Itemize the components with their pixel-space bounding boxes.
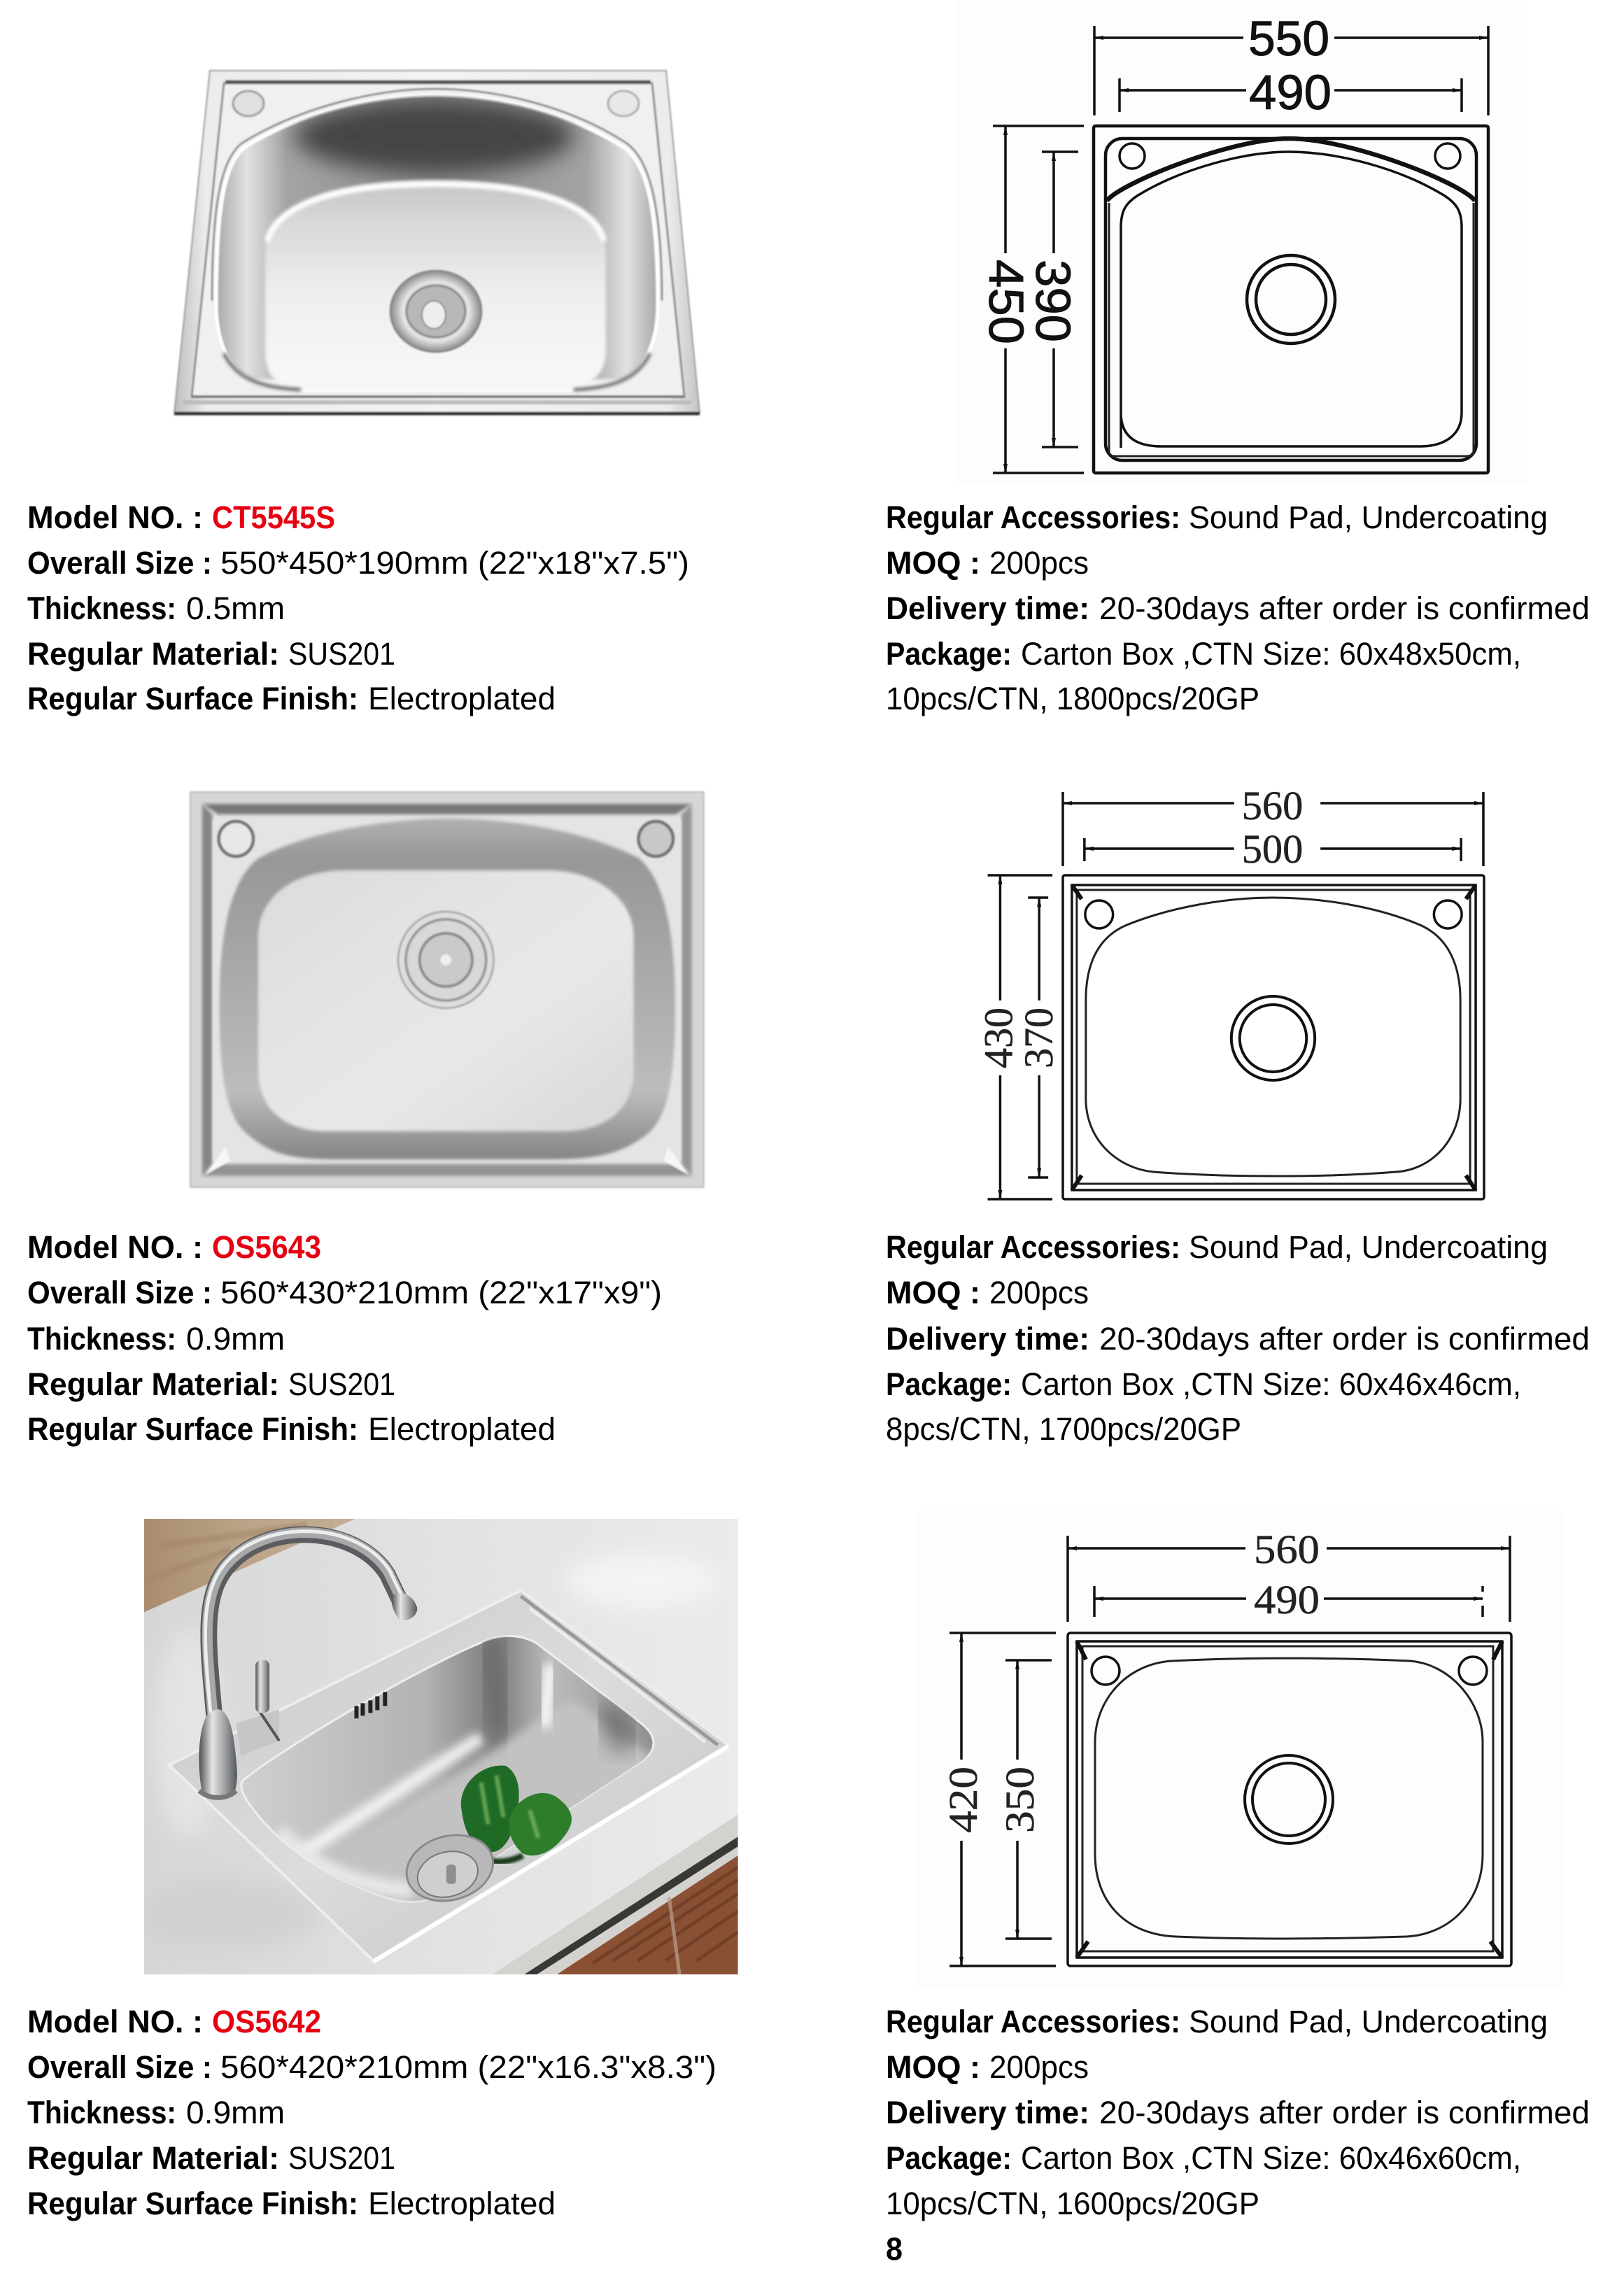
dimension: height 450 [979, 126, 1084, 473]
text block: OS5643 logistics: Carton Box ,CTN Size: 60x46x46cm, [1021, 1366, 1521, 1402]
technical drawing: OS5642 [916, 1511, 1563, 1988]
dimension: height 370 [1016, 898, 1061, 1177]
dimension: width 500 [1085, 826, 1461, 872]
text block: OS5642 logistics: Sound Pad, Undercoating [1189, 2004, 1548, 2039]
text block: CT5545S logistics: Carton Box ,CTN Size: 60x48x50cm, [1021, 636, 1521, 672]
dimension: width 490 [1094, 1577, 1483, 1622]
dimension: height 350: 350 [997, 1767, 1043, 1833]
text block: OS5642 logistics: Regular Accessories: [886, 2004, 1180, 2039]
page number: 8 [886, 2231, 903, 2267]
text block: OS5642 logistics: Delivery time: [886, 2095, 1089, 2130]
dimension: width 550: 550 [1248, 11, 1329, 66]
dimension: width 560 [1063, 783, 1483, 866]
text block: CT5545S logistics: 200pcs [989, 545, 1089, 581]
text block: OS5643 specifications: Thickness: [27, 1321, 176, 1357]
panel: model CT5545S [27, 0, 1590, 716]
text block: OS5643 logistics: Delivery time: [886, 1321, 1089, 1357]
text block: OS5643 specifications: Electroplated [368, 1411, 556, 1447]
text block: OS5643 logistics: 200pcs [989, 1275, 1089, 1310]
text block: OS5642 specifications: SUS201 [288, 2140, 395, 2176]
icon: overflow slots [356, 1692, 385, 1718]
text block: OS5643 logistics: Sound Pad, Undercoating [1189, 1229, 1548, 1265]
dimension: height 350 [997, 1660, 1052, 1939]
text block: OS5643 specifications [27, 1229, 662, 1447]
text block: CT5545S logistics: Package: [886, 636, 1012, 672]
photo: sink OS5643 [190, 792, 704, 1187]
text block: OS5642 specifications: 560*420*210mm (22"x16.3"x8.3") [220, 2049, 716, 2085]
text block: CT5545S logistics: Regular Accessories: [886, 500, 1180, 535]
text block: CT5545S logistics [886, 500, 1590, 716]
dimension: width 490 [1120, 65, 1462, 120]
text block: OS5643 specifications: Overall Size : [27, 1275, 212, 1310]
dimension: width 560 [1068, 1527, 1510, 1622]
text block: OS5643 logistics: 20-30days after order is confirmed [1099, 1321, 1590, 1357]
text block: OS5642 specifications [27, 2004, 716, 2221]
icon: drain OS5643 [398, 912, 494, 1008]
text block: CT5545S logistics: MOQ : [886, 545, 980, 581]
text block: OS5642 logistics: Package: [886, 2140, 1012, 2176]
dimension: width 490: 490 [1254, 1577, 1320, 1622]
text block: OS5643 logistics: Regular Accessories: [886, 1229, 1180, 1265]
text block: CT5545S specifications: 550*450*190mm (22"x18"x7.5") [220, 545, 689, 581]
text block: OS5643 logistics [886, 1229, 1590, 1447]
text block: OS5643 specifications: Regular Material: [27, 1366, 279, 1402]
text block: CT5545S specifications [27, 500, 689, 716]
text block: CT5545S specifications: Thickness: [27, 590, 176, 626]
text block: OS5643 specifications: 0.9mm [186, 1321, 285, 1357]
icon: drain OS5642 [406, 1834, 494, 1902]
text block: CT5545S specifications: Model NO. : [27, 500, 203, 535]
photo: sink CT5545S [174, 71, 700, 413]
text block: OS5642 logistics: MOQ : [886, 2049, 980, 2085]
dimension: height 420: 420 [940, 1767, 986, 1833]
icon: faucet [199, 1531, 417, 1797]
text block: OS5642 specifications: 0.9mm [186, 2095, 285, 2130]
text block: OS5642 logistics: 10pcs/CTN, 1600pcs/20GP [886, 2186, 1259, 2221]
text block: OS5642 specifications: OS5642 [212, 2004, 321, 2039]
text block: OS5642 specifications: Regular Surface Finish: [27, 2186, 358, 2221]
dimension: height 430 [975, 875, 1052, 1199]
text block: OS5642 logistics [886, 2004, 1590, 2221]
text block: OS5642 specifications: Model NO. : [27, 2004, 203, 2039]
text block: CT5545S logistics: 20-30days after order is confirmed [1099, 590, 1590, 626]
icon: drain CT5545S [390, 271, 481, 352]
text block: OS5642 specifications: Thickness: [27, 2095, 176, 2130]
text block: CT5545S specifications: CT5545S [212, 500, 335, 535]
dimension: height 430: 430 [975, 1007, 1021, 1068]
technical drawing: CT5545S [954, 0, 1528, 483]
dimension: width 490: 490 [1249, 65, 1332, 120]
text block: OS5642 logistics: Carton Box ,CTN Size: 60x46x60cm, [1021, 2140, 1521, 2176]
text block: CT5545S specifications: Regular Surface Finish: [27, 681, 358, 716]
panel: model OS5643 [27, 783, 1590, 1447]
text block: CT5545S logistics: Sound Pad, Undercoating [1189, 500, 1548, 535]
text block: CT5545S specifications: SUS201 [288, 636, 395, 672]
dimension: height 420 [940, 1633, 1056, 1966]
text block: CT5545S specifications: Overall Size : [27, 545, 212, 581]
text block: CT5545S logistics: Delivery time: [886, 590, 1089, 626]
photo: sink OS5642 installed with faucet and peppers [140, 1519, 738, 1974]
dimension: width 500: 500 [1242, 826, 1303, 872]
text block: OS5642 logistics: 200pcs [989, 2049, 1089, 2085]
dimension: width 560: 560 [1254, 1527, 1320, 1572]
dimension: height 390: 390 [1026, 260, 1080, 342]
panel: model OS5642 [27, 1511, 1590, 2221]
dimension: height 390 [1026, 152, 1080, 447]
text block: OS5642 specifications: Electroplated [368, 2186, 556, 2221]
text block: CT5545S specifications: Electroplated [368, 681, 556, 716]
text block: CT5545S specifications: Regular Material: [27, 636, 279, 672]
text block: OS5643 logistics: Package: [886, 1366, 1012, 1402]
text block: OS5643 specifications: OS5643 [212, 1229, 321, 1265]
text block: OS5643 specifications: Model NO. : [27, 1229, 203, 1265]
text block: OS5643 logistics: MOQ : [886, 1275, 980, 1310]
text block: CT5545S logistics: 10pcs/CTN, 1800pcs/20GP [886, 681, 1259, 716]
technical drawing: OS5643 [975, 783, 1484, 1199]
dimension: width 550 [1094, 11, 1488, 115]
text block: OS5642 specifications: Overall Size : [27, 2049, 212, 2085]
icon: green peppers [461, 1766, 572, 1862]
text block: OS5643 specifications: 560*430*210mm (22"x17"x9") [220, 1275, 662, 1310]
dimension: height 370: 370 [1016, 1007, 1061, 1068]
text block: OS5643 specifications: Regular Surface Finish: [27, 1411, 358, 1447]
text block: CT5545S specifications: 0.5mm [186, 590, 285, 626]
text block: OS5642 specifications: Regular Material: [27, 2140, 279, 2176]
dimension: width 560: 560 [1242, 783, 1303, 828]
text block: OS5643 logistics: 8pcs/CTN, 1700pcs/20GP [886, 1411, 1241, 1447]
text block: OS5642 logistics: 20-30days after order is confirmed [1099, 2095, 1590, 2130]
text block: OS5643 specifications: SUS201 [288, 1366, 395, 1402]
dimension: height 450: 450 [979, 260, 1033, 344]
